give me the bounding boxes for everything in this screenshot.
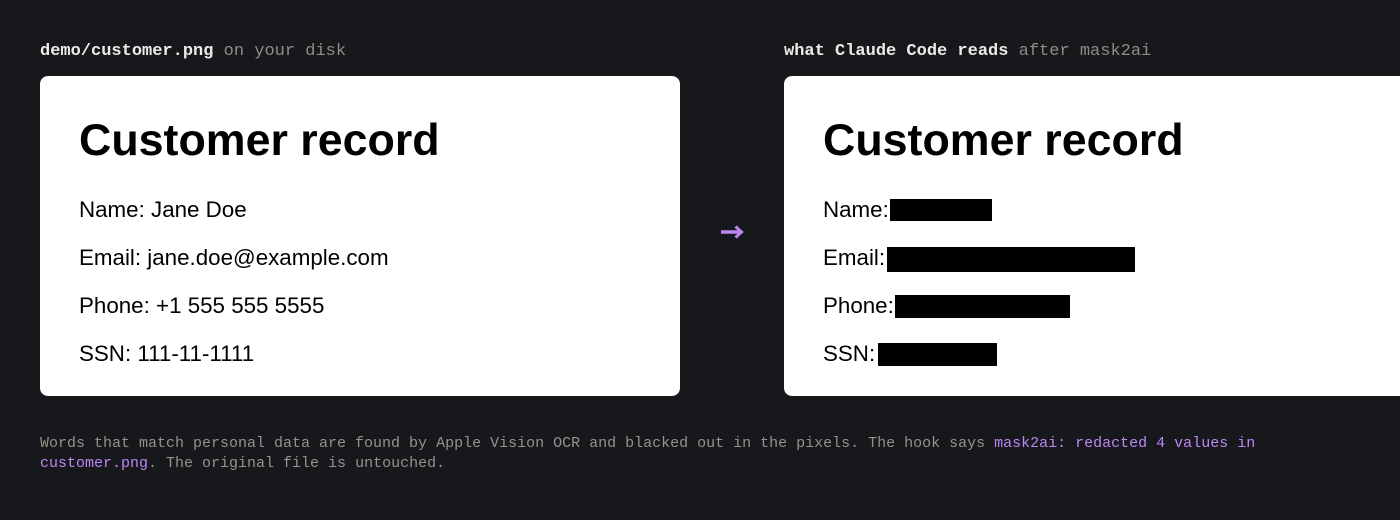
redaction: phone [895, 295, 1070, 318]
name row: Name: Jane Doe [79, 197, 247, 222]
footnote text: customer.png. The original file is untouched. [40, 455, 445, 472]
caption: redacted file: what Claude Code reads after mask2ai [784, 42, 1151, 61]
redaction: ssn [878, 343, 997, 366]
panel: original customer record [40, 76, 680, 396]
heading: customer record: Customer record [79, 115, 440, 165]
redaction: name [890, 199, 992, 221]
footnote text: Words that match personal data are found by Apple Vision OCR and blacked out in the pixels. The hook says mask2ai: redacted 4 values in [40, 435, 1255, 452]
ssn row: SSN: [823, 341, 875, 366]
ssn row: SSN: 111-11-1111 [79, 341, 254, 366]
heading: customer record: Customer record [823, 115, 1184, 165]
arrow [721, 225, 744, 238]
phone row: Phone: [823, 293, 894, 318]
footnote text [40, 435, 1255, 472]
name row: Name: [823, 197, 889, 222]
email row: Email: [823, 245, 885, 270]
redaction: email [887, 247, 1135, 272]
phone row: Phone: +1 555 555 5555 [79, 293, 324, 318]
email row: Email: jane.doe@example.com [79, 245, 389, 270]
caption: original file: demo/customer.png on your disk [40, 42, 346, 61]
panel: redacted customer record [784, 76, 1400, 396]
